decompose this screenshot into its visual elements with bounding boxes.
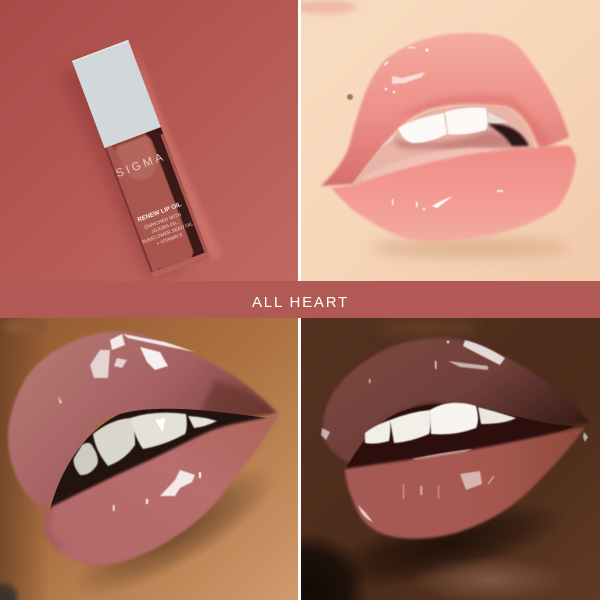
tooth shine [155,418,165,432]
skin shading [293,0,357,14]
tongue [362,148,512,182]
product description [142,212,193,244]
lower lip edge [47,510,62,549]
band title: ALL HEART [252,294,349,311]
gloss highlights [384,47,503,210]
panel: lips on light skin [293,0,600,281]
teeth [365,403,516,463]
upper lip [321,33,569,186]
upper lip [323,338,589,463]
mouth interior [50,409,268,510]
oil reservoir [112,134,195,270]
skin shading [0,318,43,600]
panel: lips on deep skin [301,318,600,600]
product: lip oil tube [72,40,209,278]
teeth [380,108,508,148]
mouth interior [351,106,535,188]
product glow [138,60,220,259]
upper lip [8,331,277,510]
product shadow [62,60,185,279]
product description: JOJOBA OIL, [151,220,180,235]
upper lip flush [395,94,550,145]
tube body [112,127,207,276]
band [0,281,600,318]
product name: RENEW LIP OIL [137,201,183,224]
mouth shadow [392,130,530,149]
panel: lips on medium skin [0,318,298,600]
lower lip [345,427,585,539]
product description: SUNFLOWER SEED OIL [141,221,194,246]
gloss highlights [58,334,201,511]
lower lip [331,146,576,242]
product description: + VITAMIN E [156,232,184,247]
brand: SIGMA: SIGMA [114,151,167,180]
upper lip dark corner [200,380,275,417]
cap [72,40,161,148]
teeth [74,413,217,475]
beauty mark [347,94,353,100]
lower lip [45,414,279,565]
panel: product photo [0,0,298,281]
skin shading [301,536,364,600]
gloss highlights [321,340,588,522]
mouth dark [488,124,529,146]
product description: ENRICHED WITH [144,212,183,231]
applicator [116,134,156,180]
mouth interior [345,404,575,470]
